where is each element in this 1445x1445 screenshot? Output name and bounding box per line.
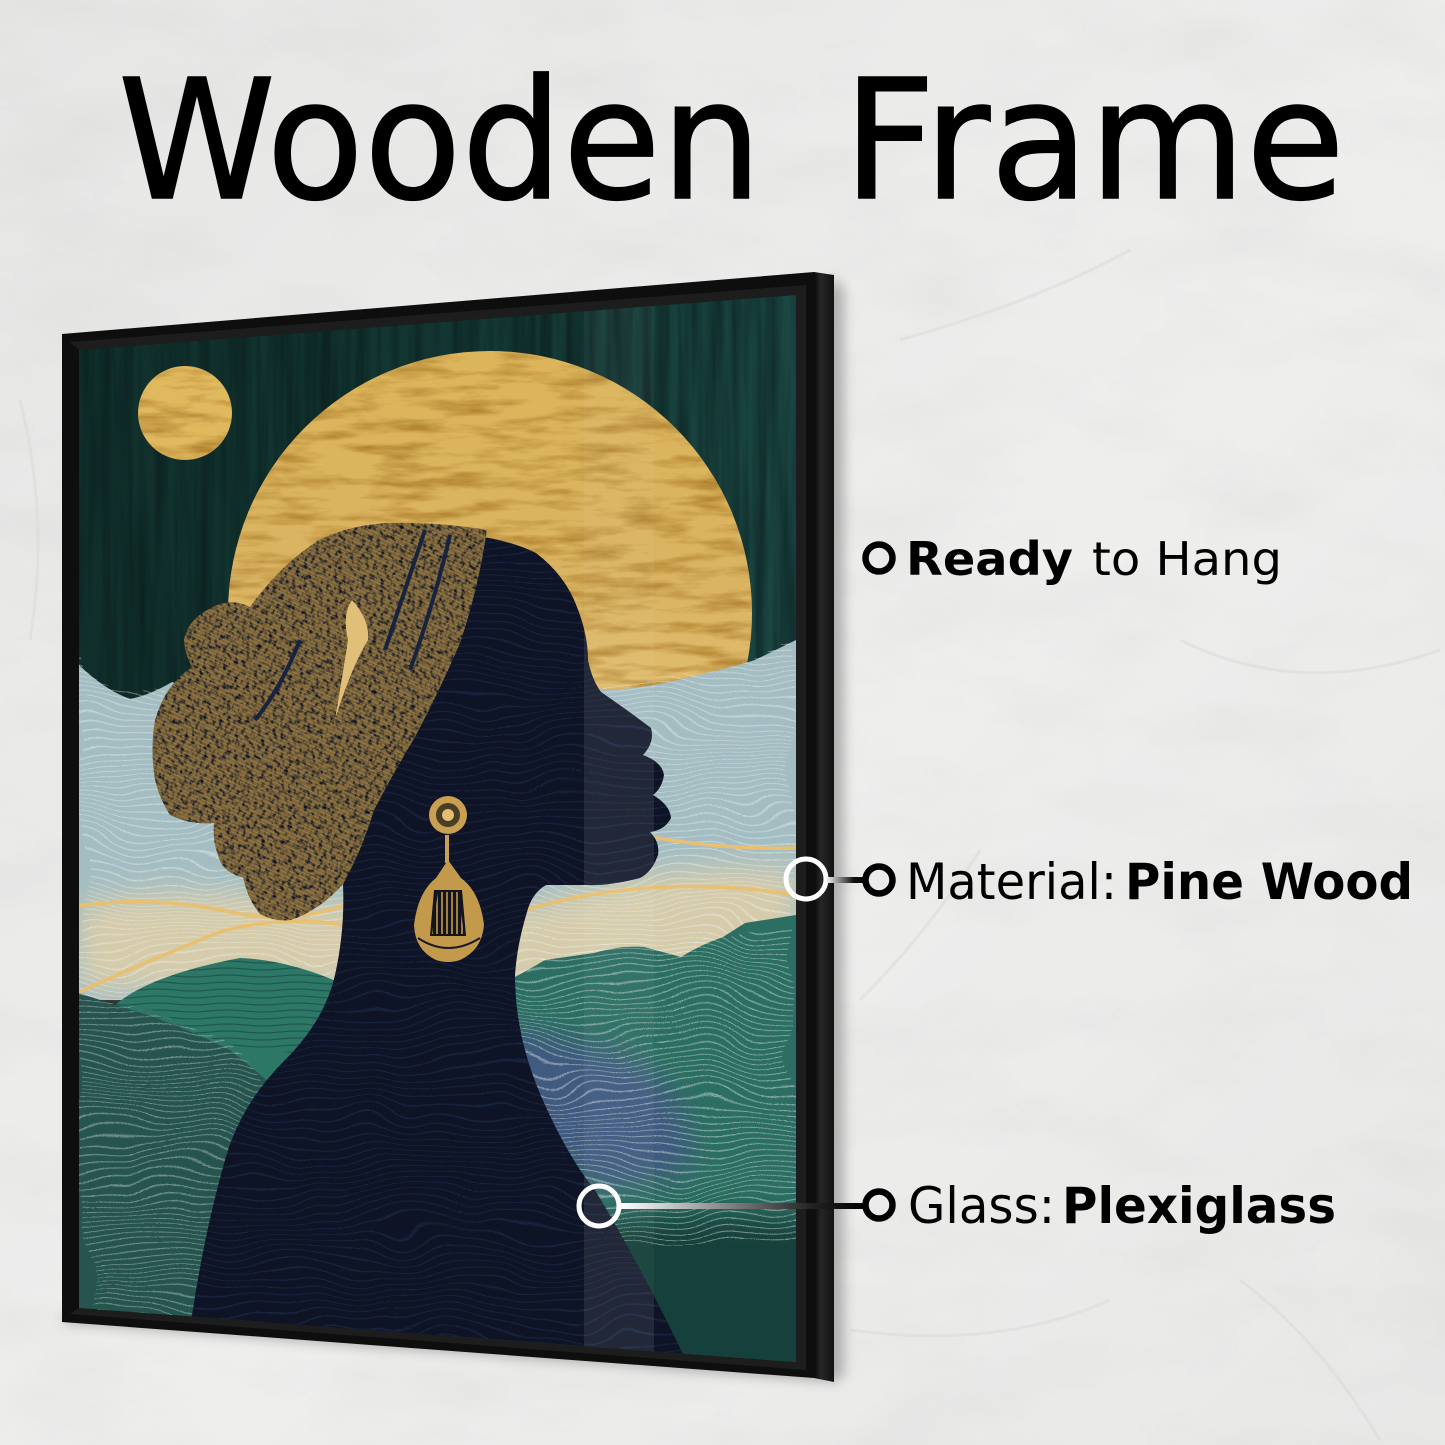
green hills right	[440, 915, 796, 1362]
title: Wooden	[118, 45, 762, 238]
patterned head wrap	[152, 523, 487, 920]
callout: glass plexiglass: Glass:	[908, 1177, 1055, 1235]
frame side	[814, 272, 834, 1382]
callout: material pine wood: Pine Wood	[1125, 853, 1413, 911]
callout: ready to hang: Ready	[906, 532, 1073, 586]
callout: ready to hang	[866, 532, 1282, 586]
pale blue mountains	[79, 640, 796, 1000]
callout: ready to hang: to Hang	[1092, 532, 1282, 586]
callout: glass plexiglass: Plexiglass	[1062, 1177, 1336, 1235]
small gold moon	[138, 366, 232, 460]
callout: material pine wood: Material:	[906, 853, 1117, 911]
artwork	[79, 295, 796, 1362]
green hills left	[79, 958, 345, 1340]
callout: material pine wood	[786, 853, 1413, 911]
title: Frame	[843, 45, 1345, 238]
frame shadow	[62, 278, 844, 1382]
night sky	[79, 295, 796, 735]
frame bevel	[70, 285, 806, 1370]
large gold sun	[228, 351, 752, 690]
framed canvas	[60, 272, 850, 1388]
glass reflection	[584, 290, 654, 1380]
frame front	[62, 272, 814, 1378]
callout: glass plexiglass	[579, 1177, 1336, 1235]
wrap fold highlight	[335, 600, 368, 720]
gold earring	[414, 796, 484, 962]
sand glow band	[79, 868, 796, 990]
woman silhouette	[192, 537, 682, 1354]
